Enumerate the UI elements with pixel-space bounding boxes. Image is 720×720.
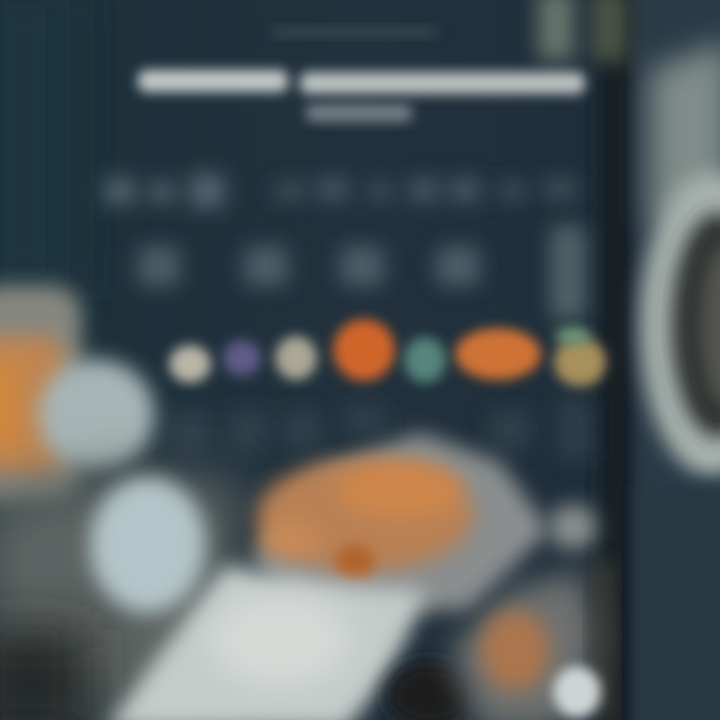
lower left grey surface [0,470,240,720]
metal utensil [450,505,612,720]
ingredient: long orange [455,328,541,380]
row of small text labels [105,174,575,208]
lower text rows [170,400,590,460]
panel: right wall and post [538,0,720,720]
ingredient: orange [333,319,395,381]
icon: round machine at right [640,40,720,477]
ingredient: cream [275,336,317,380]
bowl of orange food [250,432,550,615]
lower right panel [640,485,720,720]
small heading above title [272,27,438,37]
left glass with orange drink [0,285,82,505]
orange piece [481,610,549,690]
title [138,70,585,94]
white cloth [105,565,425,720]
row of food ingredient swatches [169,319,606,387]
white ball lower [90,477,206,613]
ingredient: pale [169,345,211,383]
row of column icons [138,225,586,320]
ingredient: green [404,337,446,383]
white blob bottom right [553,666,601,718]
dark shadow under bowl [386,661,474,720]
ingredient: yellow green [554,337,606,387]
ingredient: purple [223,340,261,376]
subtitle [306,104,412,122]
white ball left [39,359,155,471]
